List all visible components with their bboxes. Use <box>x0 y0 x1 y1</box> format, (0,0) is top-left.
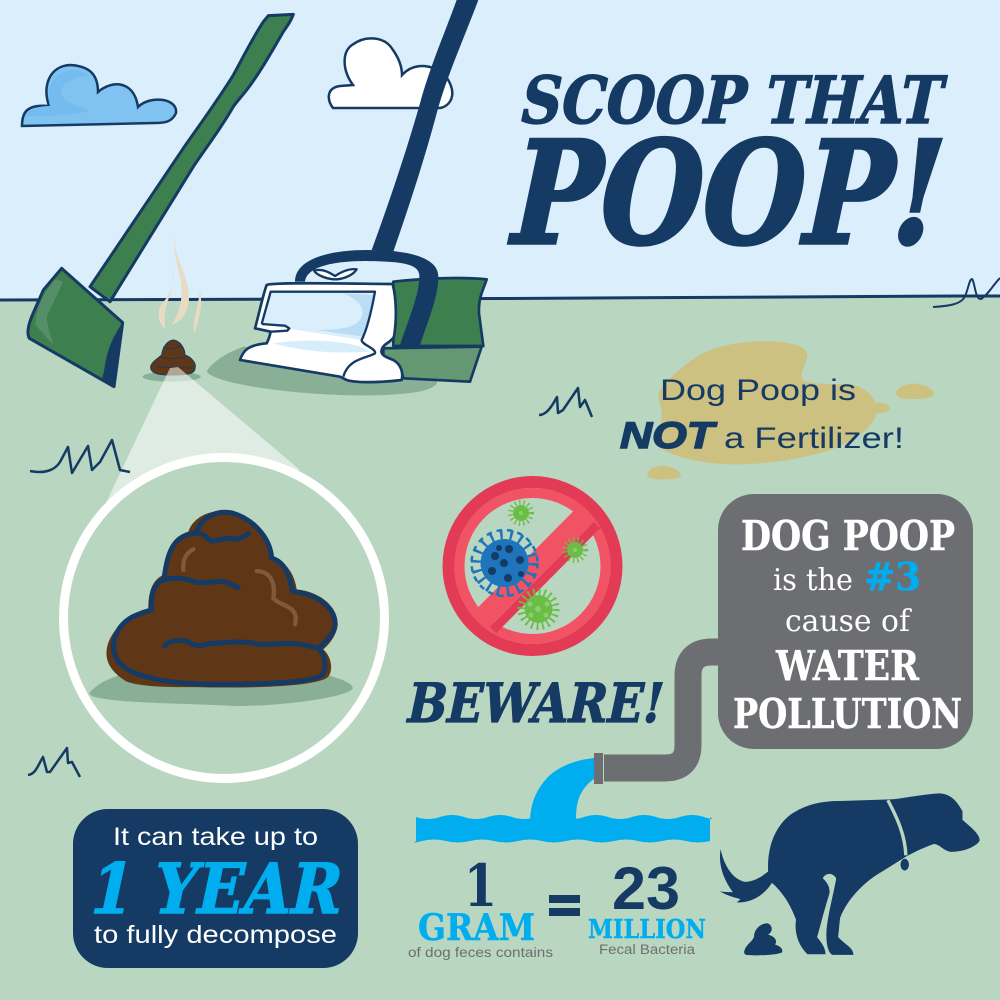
stat: 1 gram: of dog feces contains <box>408 945 553 960</box>
stat: 1 gram: GRAM <box>418 907 535 949</box>
panel: water pollution: is the <box>773 563 853 598</box>
illustration: large poop <box>89 511 353 706</box>
panel: 1 year: 1 YEAR <box>82 849 352 930</box>
panel: water pollution: WATER <box>775 642 920 690</box>
illustration: navy scoop with bag <box>207 0 487 395</box>
stat: 23 million: MILLION <box>588 915 706 945</box>
equals sign <box>549 895 580 916</box>
magnifier circle <box>64 458 384 778</box>
stat: 1 gram: 1 <box>464 852 497 920</box>
grass tuft left <box>30 440 130 473</box>
panel: 1 year <box>73 809 358 968</box>
grass tuft lower <box>28 748 80 777</box>
icon: no bacteria sign <box>448 482 616 650</box>
spotlight beam <box>105 367 300 505</box>
grass tuft horizon <box>933 278 1000 307</box>
stat: 23 million: 23 <box>612 855 680 922</box>
icon: dog silhouette <box>720 793 980 955</box>
text: a fertilizer: a Fertilizer! <box>724 422 904 455</box>
icon: blue cloud <box>22 65 176 126</box>
ground <box>0 297 1000 1000</box>
icon: water stream and waves <box>414 758 712 842</box>
stat: 23 million: Fecal Bacteria <box>599 942 696 957</box>
stat: 1 gram <box>408 852 553 960</box>
text: beware: BEWARE! <box>401 672 671 735</box>
panel: 1 year: to fully decompose <box>94 921 337 949</box>
illustration: green scoop <box>28 14 293 387</box>
panel: water pollution: cause of <box>785 604 912 639</box>
panel: water pollution: DOG POOP <box>741 512 955 560</box>
panel: water pollution <box>718 494 973 749</box>
urine stain <box>647 341 934 479</box>
panel: water pollution: #3 <box>864 554 921 599</box>
pipe <box>594 652 720 784</box>
text: dog poop is: Dog Poop is <box>660 374 856 407</box>
grass tuft middle <box>539 388 592 417</box>
illustration: small poop with steam <box>143 235 201 382</box>
icon: white cloud <box>329 38 452 108</box>
text: not: NOT <box>620 415 718 456</box>
panel: 1 year: It can take up to <box>113 823 318 851</box>
stat: 23 million <box>588 855 706 957</box>
